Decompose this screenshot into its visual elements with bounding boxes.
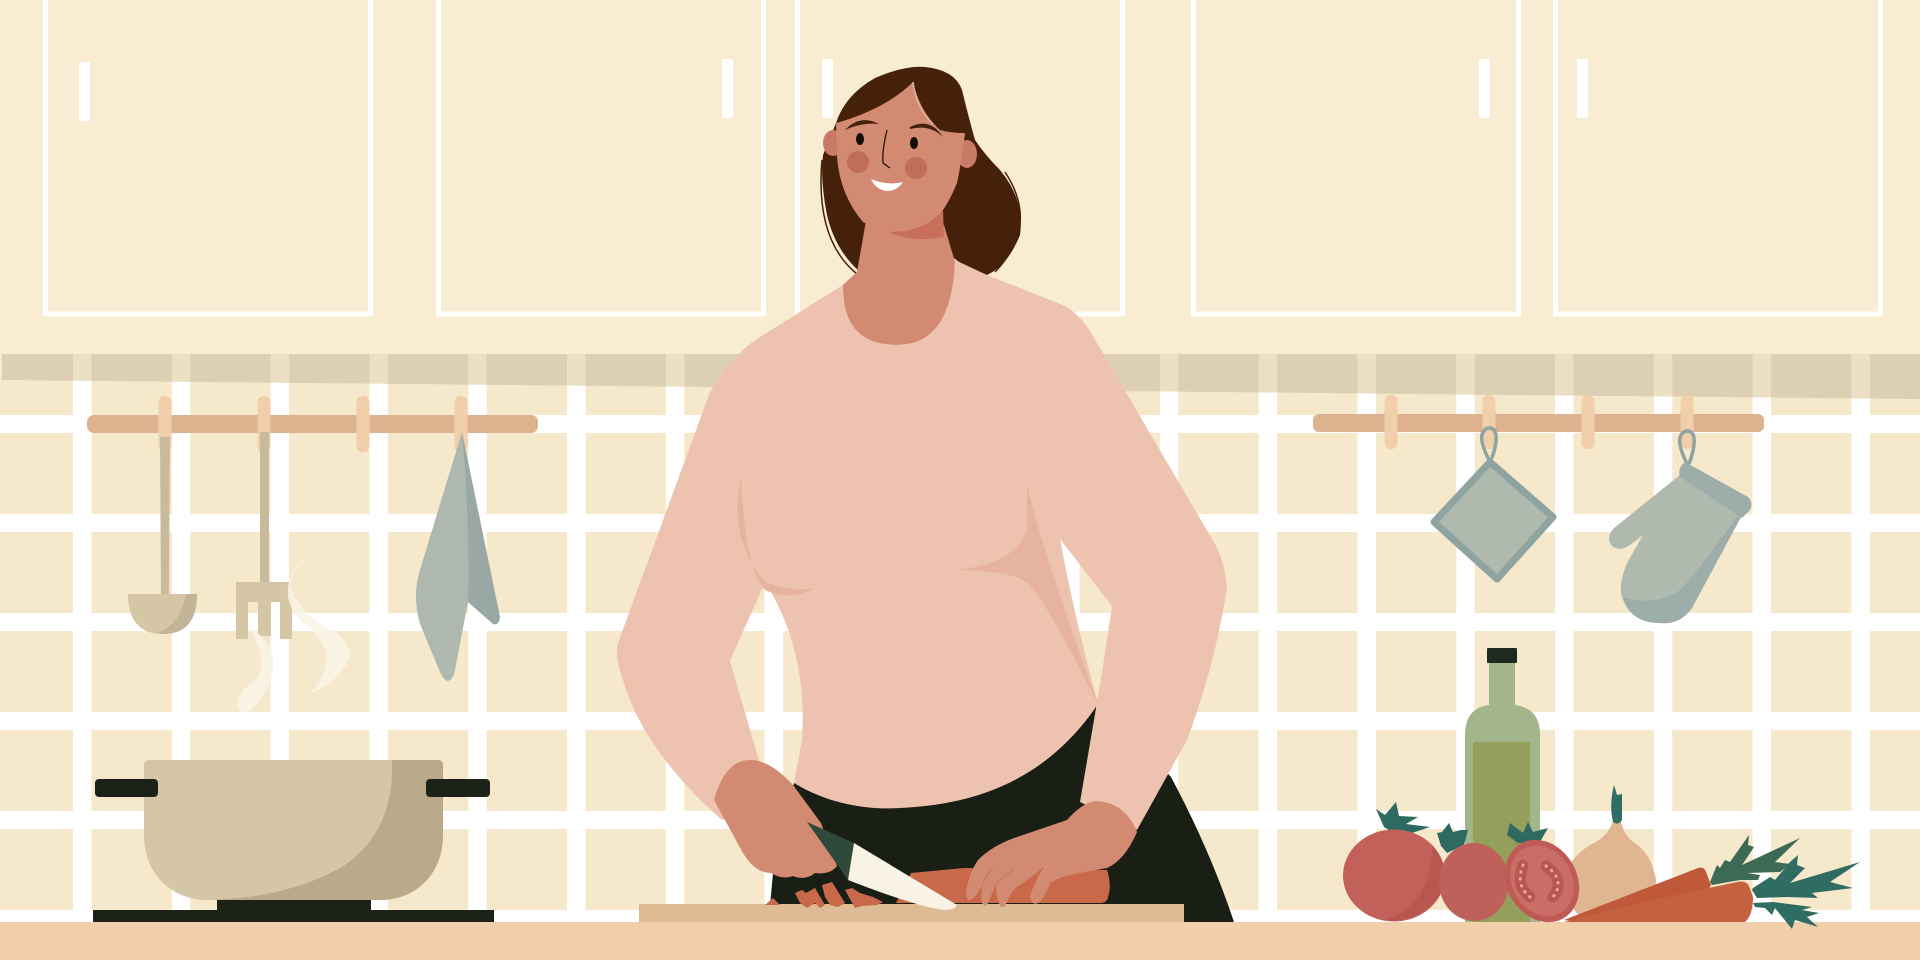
- right hand: [966, 801, 1137, 907]
- icon: ladle: [128, 437, 197, 634]
- eyebrows: [845, 120, 943, 137]
- nose: [883, 130, 890, 168]
- left hand: [714, 760, 837, 878]
- knife handle: [807, 822, 854, 880]
- icon: oven mitt: [1609, 431, 1752, 623]
- onion: [1566, 785, 1656, 922]
- icon: hanging towel: [416, 432, 500, 681]
- cabinet shadow band: [2, 354, 1920, 399]
- hair: [822, 67, 1021, 275]
- cabinet doors: [46, 0, 1880, 314]
- neck: [843, 215, 955, 345]
- left utensil rail: [87, 396, 538, 452]
- cheeks: [847, 151, 927, 179]
- counter top: [0, 922, 1920, 960]
- carrots: [1564, 868, 1753, 922]
- stove burner: [93, 900, 494, 923]
- upper wall background: [0, 0, 1920, 360]
- chopped carrot pieces: [765, 882, 883, 908]
- chin shadow: [889, 210, 944, 239]
- icon: pot holder: [1434, 428, 1553, 579]
- sweater shading right: [953, 484, 1098, 704]
- icon: second tomato: [1439, 843, 1509, 921]
- hair parting: [913, 82, 933, 124]
- ears: [823, 130, 977, 168]
- hair strands: [821, 160, 1020, 274]
- steam from pot: [238, 558, 349, 712]
- right utensil rail: [1313, 395, 1764, 449]
- smile: [871, 179, 903, 191]
- cutting board: [639, 904, 1184, 922]
- icon: stock pot: [95, 760, 490, 900]
- olive oil bottle: [1465, 648, 1540, 922]
- eyes: [856, 133, 918, 149]
- icon: whole tomato: [1343, 830, 1445, 922]
- tiled wall: [0, 354, 1920, 924]
- finger creases: [983, 867, 1013, 884]
- person: [617, 67, 1234, 922]
- face: [836, 82, 965, 232]
- knife blade: [848, 843, 957, 910]
- whole carrot: [896, 868, 1110, 903]
- icon: cut tomato: [1490, 826, 1594, 936]
- sweater: [617, 260, 1227, 830]
- icon: tomato leaves: [1376, 802, 1548, 853]
- sweater shading left: [738, 478, 814, 596]
- icon: kitchen fork: [236, 432, 292, 639]
- trousers and apron: [770, 700, 1234, 922]
- carrot greens: [1710, 835, 1860, 929]
- cabinet handles: [79, 59, 1588, 121]
